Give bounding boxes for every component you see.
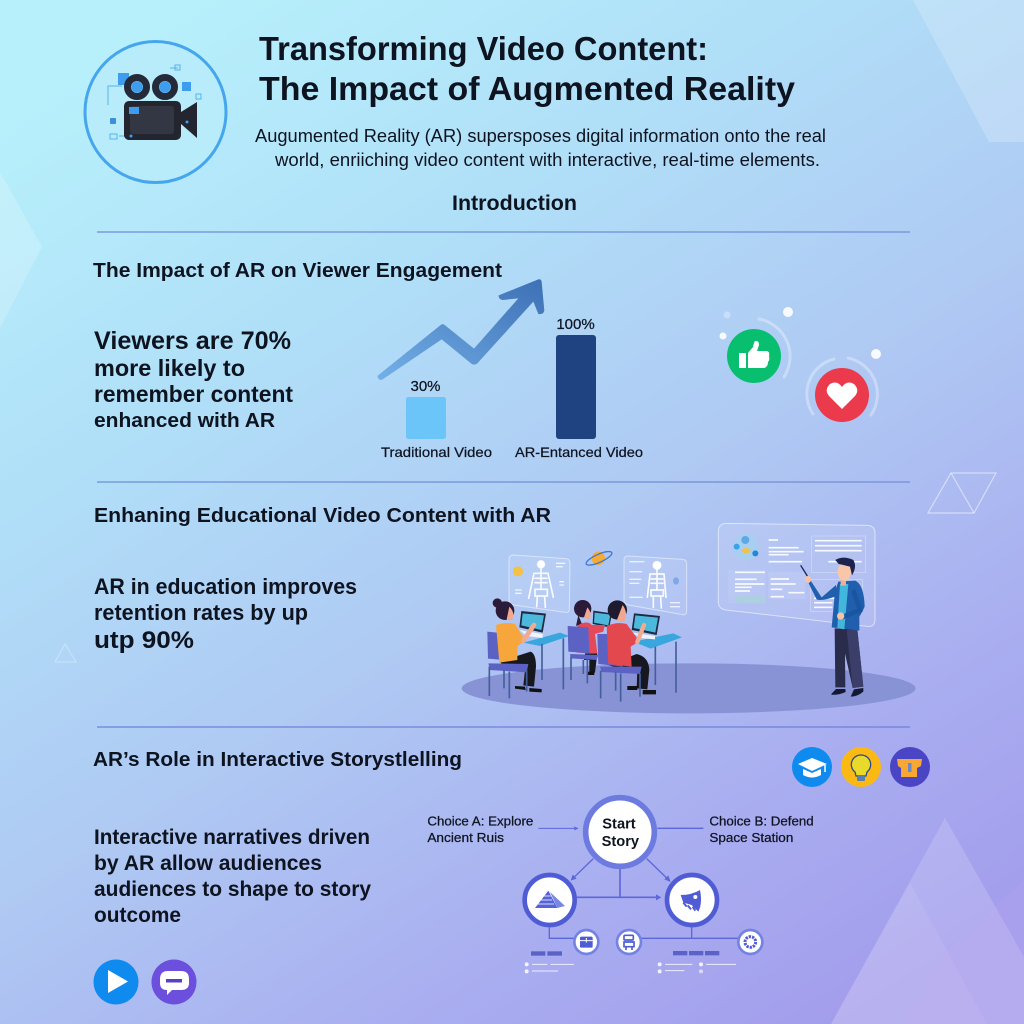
- label: choice B: Choice B: Defend: [709, 814, 814, 829]
- bar: traditional video: Traditional Video: [381, 444, 492, 460]
- icon: light bulb: [841, 747, 881, 787]
- heading: viewer engagement: The Impact of AR on Viewer Engagement: [93, 260, 502, 282]
- text block: interactive narratives: audiences to shape to story: [94, 878, 371, 901]
- text block: 70% statistic: more likely to: [94, 355, 245, 381]
- AR panel: large lesson board: [718, 523, 875, 626]
- floor ellipse: [462, 663, 916, 713]
- icon: robot node: [617, 930, 641, 954]
- bar: traditional video: [381, 378, 492, 460]
- label: choice B: Space Station: [709, 830, 793, 845]
- flow diagram: branching story: [427, 798, 814, 973]
- bar: AR-enhanced video: 100%: [556, 316, 595, 333]
- icon: gear node: [738, 930, 762, 954]
- arrow: upward trend: [377, 279, 544, 380]
- text block: interactive narratives: by AR allow audiences: [94, 852, 322, 875]
- text block: 90% statistic: retention rates by up: [94, 600, 308, 625]
- node: start story: Story: [602, 834, 640, 850]
- node: rocket: [667, 875, 717, 925]
- subtitle text block: [255, 126, 826, 170]
- bar: AR-enhanced video: [515, 316, 643, 460]
- AR panel: skeleton right: [624, 556, 687, 615]
- figure: student 3 with desk: [597, 600, 682, 702]
- illustration: AR classroom: [462, 523, 916, 713]
- text block: 70% statistic: enhanced with AR: [94, 410, 276, 432]
- heading: Introduction: Introduction: [452, 192, 577, 215]
- icon: treasure chest: [890, 747, 930, 787]
- label: choice A: Ancient Ruis: [427, 830, 505, 845]
- bar chart: traditional vs AR video: [377, 279, 643, 460]
- node: start story: [586, 798, 654, 866]
- text block: 70% statistic: remember content: [94, 381, 293, 407]
- icon row: graduation cap, bulb, chest: [792, 747, 930, 787]
- heading: interactive storytelling: AR’s Role in Interactive Storystlelling: [93, 749, 462, 771]
- icon: planet: [585, 549, 613, 568]
- node: pyramid: [525, 875, 575, 925]
- legend: rocket branch: [658, 951, 736, 973]
- icon: chest node: [574, 930, 598, 954]
- subtitle text block: world, enriiching video content with interactive, real-time elements.: [274, 150, 820, 170]
- text block: interactive narratives: Interactive narratives driven: [94, 826, 370, 849]
- title: [259, 30, 796, 107]
- heading: educational video: Enhaning Educational Video Content with AR: [94, 505, 552, 527]
- bar: traditional video: 30%: [410, 378, 441, 395]
- icon: chat bubble: [152, 960, 196, 1004]
- subtitle text block: Augumented Reality (AR) supersposes digital information onto the real: [255, 126, 826, 146]
- text block: 70% statistic: [94, 327, 293, 432]
- text block: interactive narratives: [94, 826, 371, 927]
- icon: AR video camera in circle: [85, 42, 226, 182]
- icon: play button: [94, 960, 138, 1004]
- icon: graduation cap: [792, 747, 832, 787]
- node: start story: Start: [602, 817, 636, 833]
- figure: student 1 with desk: [487, 598, 569, 698]
- text block: 90% statistic: [94, 574, 357, 654]
- figure: student 2: [568, 600, 612, 683]
- text block: 70% statistic: Viewers are 70%: [94, 327, 291, 355]
- bar: AR-enhanced video: AR-Entanced Video: [515, 444, 643, 460]
- text block: 90% statistic: AR in education improves: [94, 574, 357, 599]
- label: choice A: [427, 814, 533, 845]
- figure: teacher: [801, 558, 865, 697]
- legend: pyramid branch: [525, 951, 574, 973]
- AR panel: skeleton left: [509, 555, 570, 612]
- title: The Impact of Augmented Reality: [259, 70, 796, 107]
- text block: 90% statistic: utp 90%: [94, 627, 194, 654]
- text block: interactive narratives: outcome: [94, 904, 181, 927]
- label: choice A: Choice A: Explore: [427, 814, 533, 829]
- icon: thumbs up and heart reactions: [720, 307, 881, 422]
- label: choice B: [709, 814, 814, 845]
- title: Transforming Video Content:: [259, 30, 708, 67]
- connectors: [538, 826, 738, 938]
